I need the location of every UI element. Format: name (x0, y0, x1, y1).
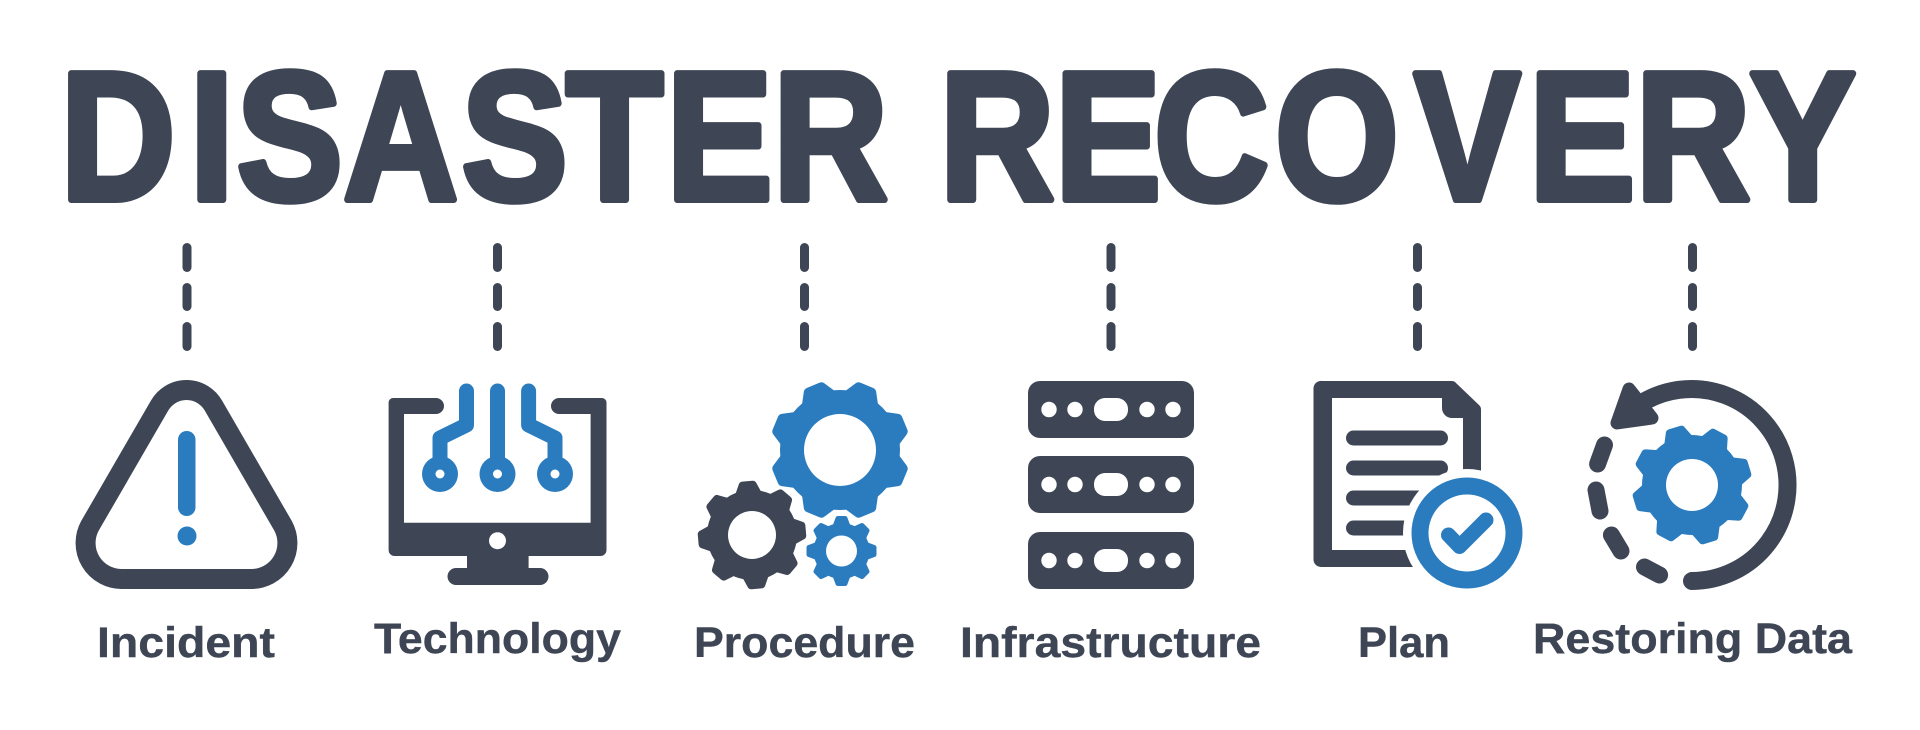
icon: warning triangle (86, 390, 287, 579)
connector: infrastructure (1106, 243, 1116, 351)
icon: server rack (1028, 381, 1194, 589)
label: incident: Incident (97, 619, 275, 667)
label: infrastructure: Infrastructure (960, 619, 1261, 667)
large blue gear (768, 378, 912, 522)
label: restoring data: Restoring Data (1533, 615, 1853, 663)
icon: monitor with circuit (389, 391, 606, 585)
icon: gears (697, 378, 912, 590)
dark gear (697, 480, 807, 590)
small blue gear (806, 516, 876, 586)
connector: plan (1413, 243, 1422, 351)
connector: restoring data (1688, 243, 1697, 351)
connector: incident (182, 243, 192, 351)
label: procedure: Procedure (694, 619, 915, 667)
circular arrow (1640, 389, 1788, 581)
icon: document with check badge (1313, 381, 1531, 597)
title (60, 35, 1856, 239)
label: technology: Technology (374, 615, 621, 663)
connector: procedure (800, 243, 809, 351)
blue gear (1630, 423, 1754, 547)
title: DISASTER (60, 35, 888, 239)
connector: technology (493, 243, 502, 351)
title: RECOVERY (940, 35, 1856, 239)
icon: restoring arrow and gear (1596, 389, 1788, 581)
label: plan: Plan (1358, 619, 1450, 667)
